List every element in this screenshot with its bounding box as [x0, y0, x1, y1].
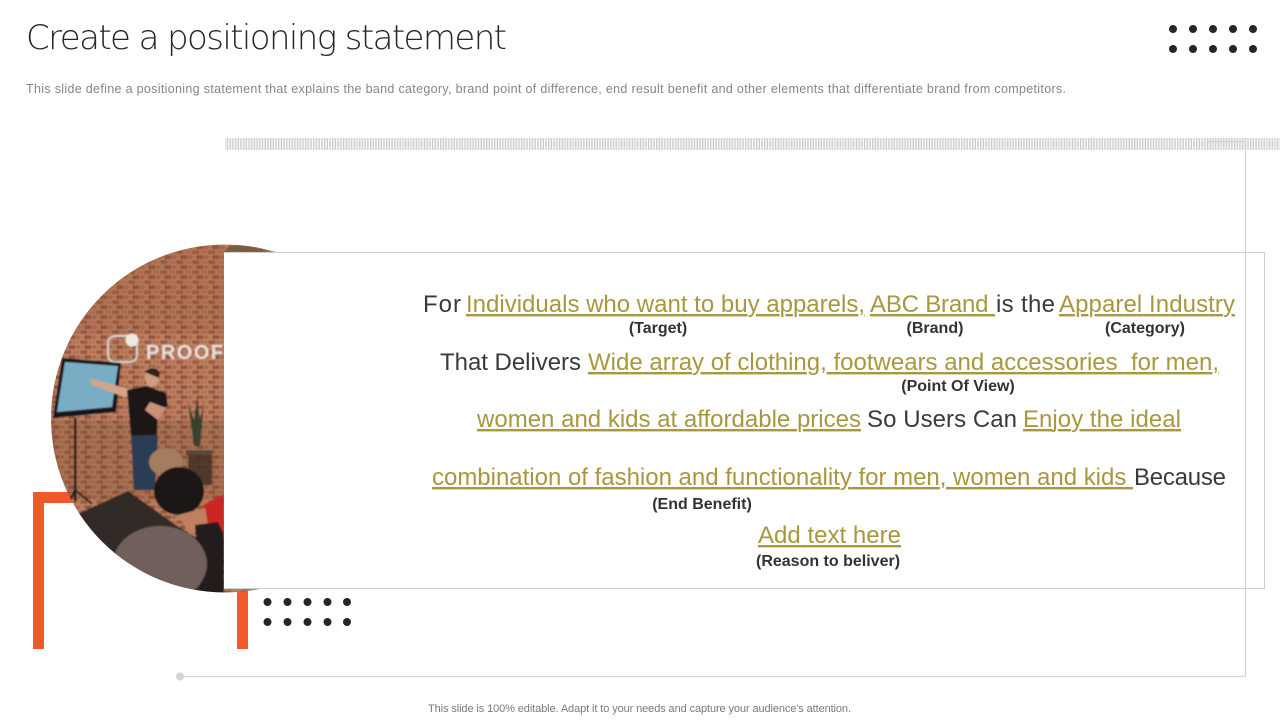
statement line 1: Individuals who want to buy apparels, [466, 291, 865, 318]
statement line 3: So Users Can [867, 406, 1017, 433]
label: point of view: (Point Of View) [901, 378, 1015, 395]
display screen [53, 358, 121, 504]
label: target, brand, category: (Brand) [907, 320, 963, 337]
audience [75, 448, 224, 602]
statement line 2: Wide array of clothing, footwears and accessories for men, [588, 349, 1219, 376]
statement line 1 [423, 291, 1235, 318]
icon: lower dot grid [264, 598, 351, 626]
statement line 3: women and kids at affordable prices [476, 406, 861, 433]
icon: top dot grid [1169, 25, 1257, 53]
title: Create a positioning statement [26, 18, 507, 58]
statement line 3 [476, 406, 1181, 433]
top edge of photo [224, 245, 271, 252]
outer frame lines [176, 142, 1246, 680]
label: target, brand, category: (Target) [629, 320, 687, 337]
statement line 4: combination of fashion and functionality for men, women and kids [432, 464, 1133, 491]
brick wall [51, 244, 276, 592]
wall sign: PROOF [146, 342, 225, 364]
statement line 4: Because [1134, 464, 1226, 491]
label: reason to believe: (Reason to beliver) [756, 553, 900, 570]
plant [186, 397, 212, 485]
subtitle: This slide define a positioning statement that explains the band category, brand point of difference, end result benefit and other elements that differentiate brand from competitors. [26, 82, 1066, 96]
wall sign [108, 334, 225, 364]
orange bracket [33, 492, 248, 649]
statement line 1: For [423, 291, 461, 318]
hatched band [225, 138, 1280, 150]
statement line 5: Add text here [758, 522, 901, 549]
footer note: This slide is 100% editable. Adapt it to your needs and capture your audience's attention. [428, 703, 851, 715]
statement line 1: ABC Brand [870, 291, 995, 318]
presenter [90, 367, 168, 490]
label: end benefit: (End Benefit) [652, 496, 752, 513]
main statement panel [224, 252, 1264, 588]
label: target, brand, category [629, 320, 1185, 337]
statement line 2: That Delivers [440, 349, 581, 376]
photo: presenter in circular crop [51, 244, 276, 592]
statement line 1: Apparel Industry [1059, 291, 1235, 318]
label: target, brand, category: (Category) [1105, 320, 1185, 337]
statement line 3: Enjoy the ideal [1023, 406, 1181, 433]
statement line 1: is the [996, 291, 1055, 318]
